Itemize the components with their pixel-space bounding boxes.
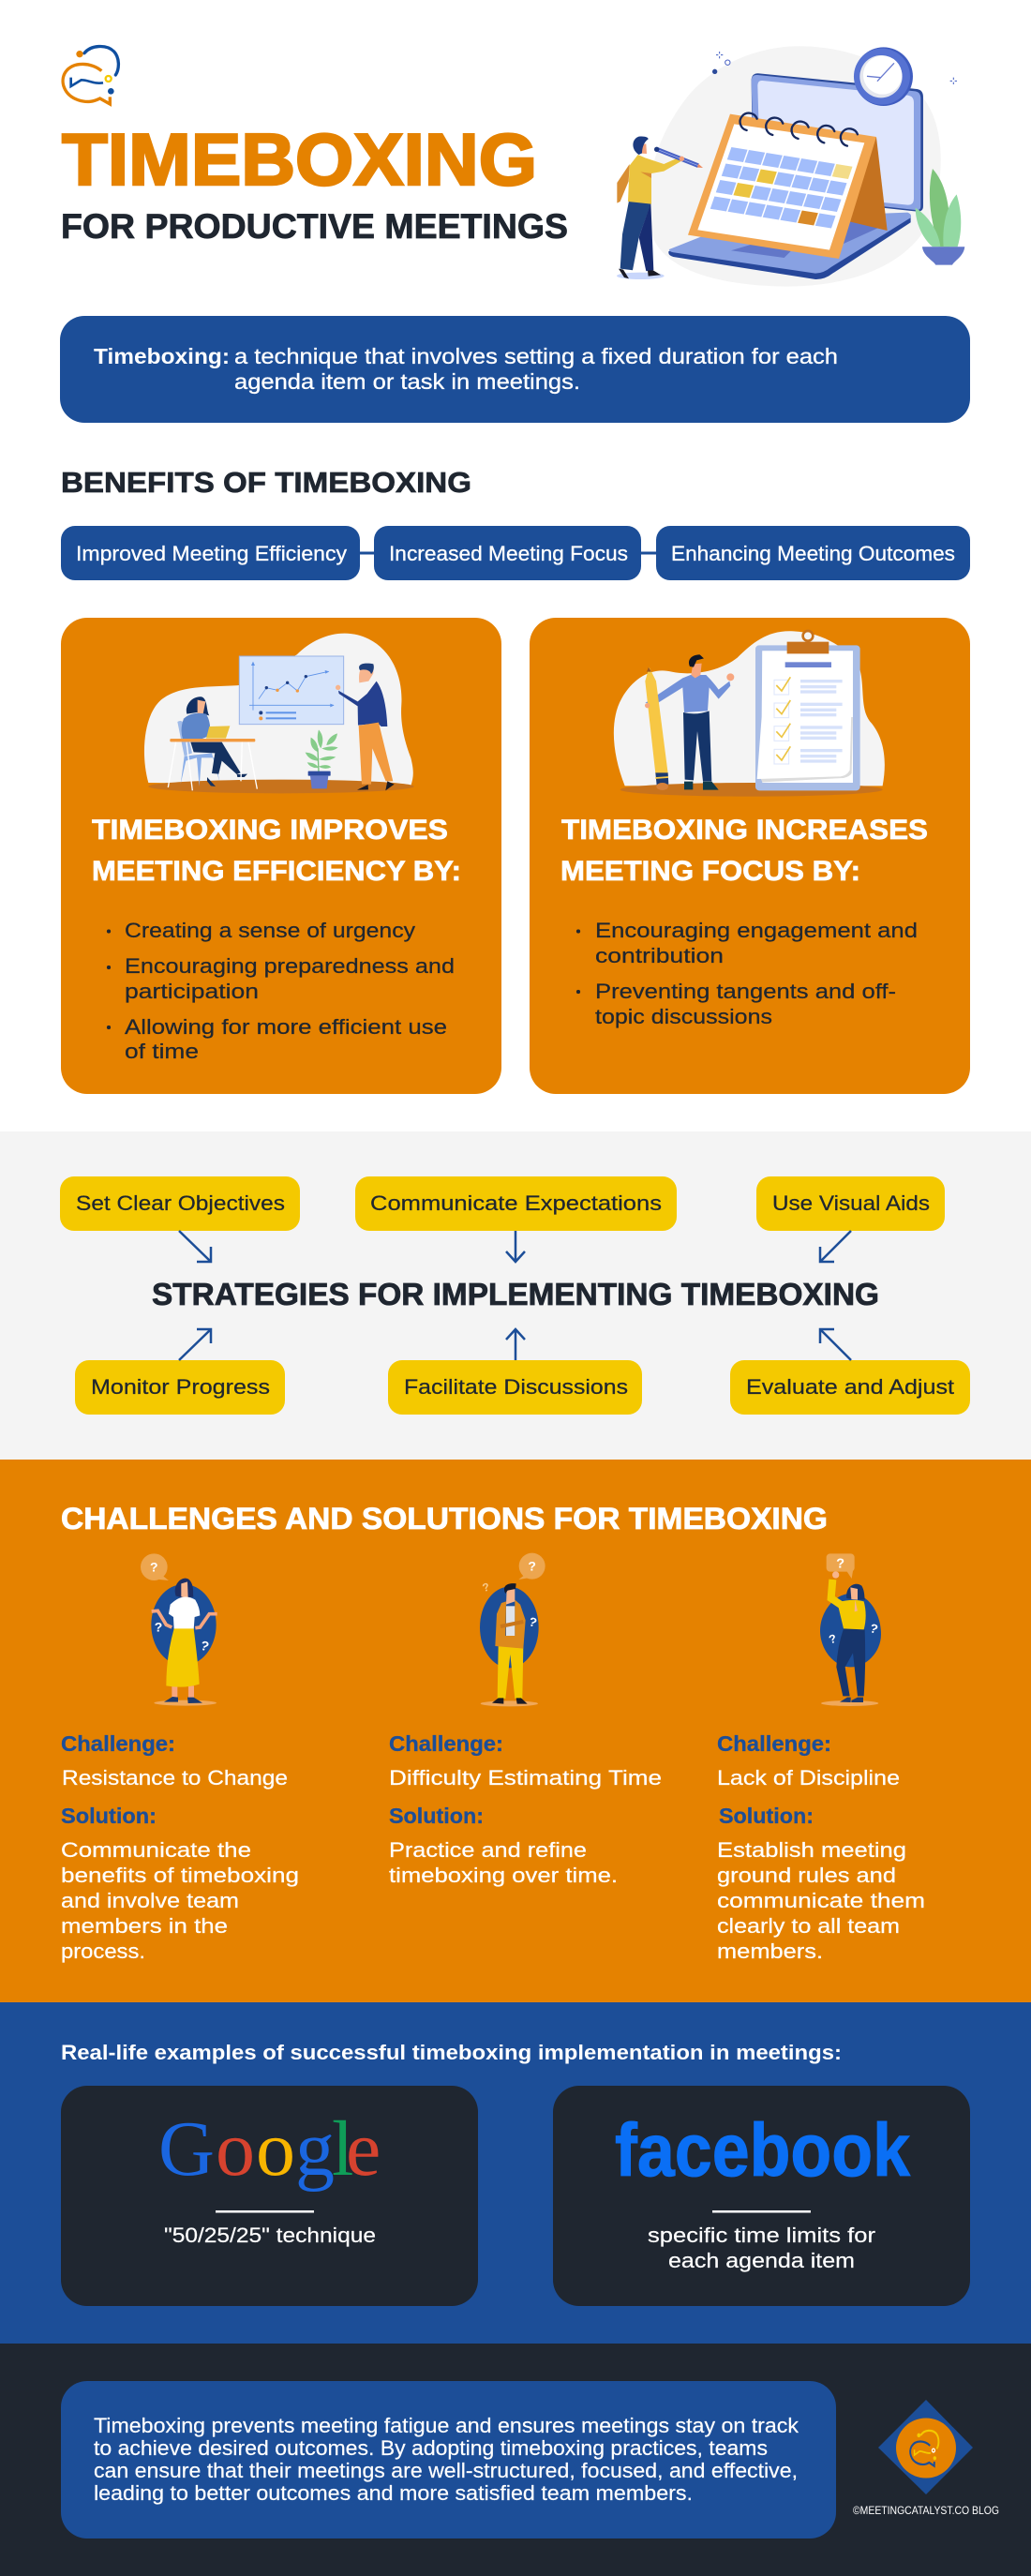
figure: woman raising hand: ? [828, 1632, 838, 1646]
strategy: communicate expectations [355, 1176, 677, 1231]
strategy: set clear objectives: Set Clear Objectives [76, 1191, 285, 1215]
heading: strategies: STRATEGIES FOR IMPLEMENTING TIMEBOXING [152, 1277, 879, 1311]
bullet list: efficiency: Creating a sense of urgency [125, 919, 415, 942]
logo text: google: e [346, 2105, 381, 2193]
definition box: a technique that involves setting a fixed duration for each [234, 344, 838, 368]
copyright: ©MEETINGCATALYST.CO BLOG [853, 2504, 999, 2517]
strategy: evaluate and adjust: Evaluate and Adjust [746, 1375, 954, 1399]
pill: improved efficiency: Improved Meeting Efficiency [76, 542, 347, 565]
card: facebook: each agenda item [668, 2249, 855, 2272]
figure: woman shrugging: ? [155, 1620, 162, 1635]
subtitle: FOR PRODUCTIVE MEETINGS [61, 207, 568, 246]
column: resistance to change [61, 1731, 299, 1963]
figure: woman shrugging [141, 1553, 217, 1706]
definition box: agenda item or task in meetings. [234, 369, 580, 394]
heading: challenges: CHALLENGES AND SOLUTIONS FOR TIMEBOXING [61, 1502, 828, 1535]
column: lack of discipline: communicate them [717, 1889, 925, 1912]
heading: improves efficiency: TIMEBOXING IMPROVES [92, 815, 448, 846]
column: resistance to change: Challenge: [61, 1731, 175, 1756]
heading: improves efficiency: MEETING EFFICIENCY BY: [92, 856, 461, 887]
strategy: facilitate discussions [388, 1360, 642, 1415]
column: difficulty estimating time [389, 1731, 662, 1887]
bullet list: efficiency [107, 919, 455, 1063]
pill: increased focus [374, 526, 641, 580]
logo text: facebook: facebook [615, 2108, 910, 2192]
logo text: google: g [295, 2105, 335, 2193]
heading: increases focus: TIMEBOXING INCREASES [561, 815, 928, 846]
figure: man thinking: ? [528, 1559, 536, 1574]
column: resistance to change: and involve team [61, 1889, 239, 1912]
figure: man thinking: ? [528, 1614, 539, 1630]
column: lack of discipline: Establish meeting [717, 1838, 906, 1862]
column: lack of discipline [717, 1731, 925, 1963]
title: TIMEBOXING [62, 118, 537, 201]
figure: woman raising hand: ? [836, 1556, 844, 1571]
column: lack of discipline: clearly to all team [717, 1914, 900, 1938]
column: lack of discipline: Challenge: [717, 1731, 831, 1756]
figure: woman raising hand [820, 1553, 881, 1706]
bullet list: focus: Encouraging engagement and [595, 919, 918, 942]
strategy: evaluate and adjust [730, 1360, 970, 1415]
conclusion text box: to achieve desired outcomes. By adopting timeboxing practices, teams [94, 2436, 768, 2460]
column: difficulty estimating time: Solution: [389, 1804, 484, 1828]
strategy: communicate expectations: Communicate Expectations [370, 1191, 662, 1215]
column: resistance to change: process. [61, 1939, 145, 1963]
panel: conclusion footer [0, 2344, 1031, 2576]
hero illustration: calendar, laptop, clock, person [617, 46, 964, 287]
figure: woman shrugging: ? [150, 1560, 158, 1575]
column: lack of discipline: Solution: [719, 1804, 814, 1828]
heading: benefits: BENEFITS OF TIMEBOXING [61, 466, 471, 499]
heading: increases focus: MEETING FOCUS BY: [560, 856, 860, 887]
heading: increases focus [560, 815, 928, 887]
heading: improves efficiency [92, 815, 461, 887]
figure: woman raising hand: ? [869, 1621, 879, 1637]
bullet list: focus: topic discussions [595, 1005, 772, 1028]
pill: enhancing outcomes [656, 526, 970, 580]
figure: man thinking: ? [481, 1580, 491, 1595]
panel: real-life examples [0, 2002, 1031, 2344]
figure: woman shrugging: ? [199, 1638, 211, 1655]
bullet list: efficiency: Encouraging preparedness and [125, 954, 455, 978]
column: difficulty estimating time: Practice and refine [389, 1838, 587, 1862]
column: lack of discipline: members. [717, 1939, 823, 1963]
logo text: google: l [332, 2105, 353, 2193]
illustration: presenter and chart [144, 634, 414, 793]
card: google [61, 2086, 478, 2306]
arrows toward heading [179, 1231, 851, 1360]
bullet list: efficiency: of time [125, 1040, 199, 1063]
column: difficulty estimating time: Challenge: [389, 1731, 503, 1756]
figure: man thinking [480, 1553, 545, 1706]
logo text: google: o [256, 2105, 295, 2193]
conclusion text box: can ensure that their meetings are well-structured, focused, and effective, [94, 2459, 798, 2482]
logo text: google: o [216, 2105, 255, 2193]
bullet list: focus: contribution [595, 944, 724, 967]
pill: improved efficiency [61, 526, 360, 580]
bullet list: focus [576, 919, 918, 1028]
column: resistance to change: benefits of timeboxing [61, 1864, 299, 1887]
conclusion text box: Timeboxing prevents meeting fatigue and ensures meetings stay on track [94, 2414, 799, 2437]
bullet list: focus: Preventing tangents and off- [595, 980, 896, 1003]
definition box [60, 316, 970, 423]
column: difficulty estimating time: timeboxing over time. [389, 1864, 618, 1887]
column: lack of discipline: ground rules and [717, 1864, 896, 1887]
conclusion text box: leading to better outcomes and more satisfied team members. [94, 2481, 693, 2505]
bullet list: efficiency: participation [125, 980, 259, 1003]
strategy: set clear objectives [60, 1176, 300, 1231]
column: difficulty estimating time: Difficulty Estimating Time [389, 1766, 662, 1790]
strategy: monitor progress [75, 1360, 285, 1415]
panel: meeting efficiency [61, 618, 501, 1094]
strategy: use visual aids: Use Visual Aids [772, 1191, 930, 1215]
panel: strategies [0, 1131, 1031, 1460]
pill: increased focus: Increased Meeting Focus [389, 542, 628, 565]
column: resistance to change: Solution: [61, 1804, 157, 1828]
card: google: "50/25/25" technique [164, 2224, 376, 2247]
panel: challenges and solutions [0, 1460, 1031, 2002]
illustration: man with pencil and checklist [614, 630, 885, 797]
card: facebook [553, 2086, 970, 2306]
strategy: monitor progress: Monitor Progress [91, 1375, 270, 1399]
column: resistance to change: Communicate the [61, 1838, 251, 1862]
logo [63, 47, 118, 104]
definition box: Timeboxing: [94, 344, 230, 368]
card: facebook: specific time limits for [648, 2224, 875, 2247]
footer logo badge [878, 2400, 973, 2494]
conclusion text box [61, 2381, 836, 2539]
logo text: google: G [158, 2105, 215, 2193]
column: lack of discipline: Lack of Discipline [717, 1766, 900, 1790]
bullet list: efficiency: Allowing for more efficient use [125, 1015, 447, 1039]
pill: enhancing outcomes: Enhancing Meeting Outcomes [671, 542, 955, 565]
column: resistance to change: members in the [61, 1914, 228, 1938]
strategy: facilitate discussions: Facilitate Discussions [404, 1375, 628, 1399]
strategy: use visual aids [756, 1176, 945, 1231]
heading: examples: Real-life examples of successful timeboxing implementation in meetings: [61, 2041, 842, 2064]
benefits row [61, 526, 970, 580]
panel: meeting focus [530, 618, 970, 1094]
column: resistance to change: Resistance to Change [62, 1766, 288, 1790]
